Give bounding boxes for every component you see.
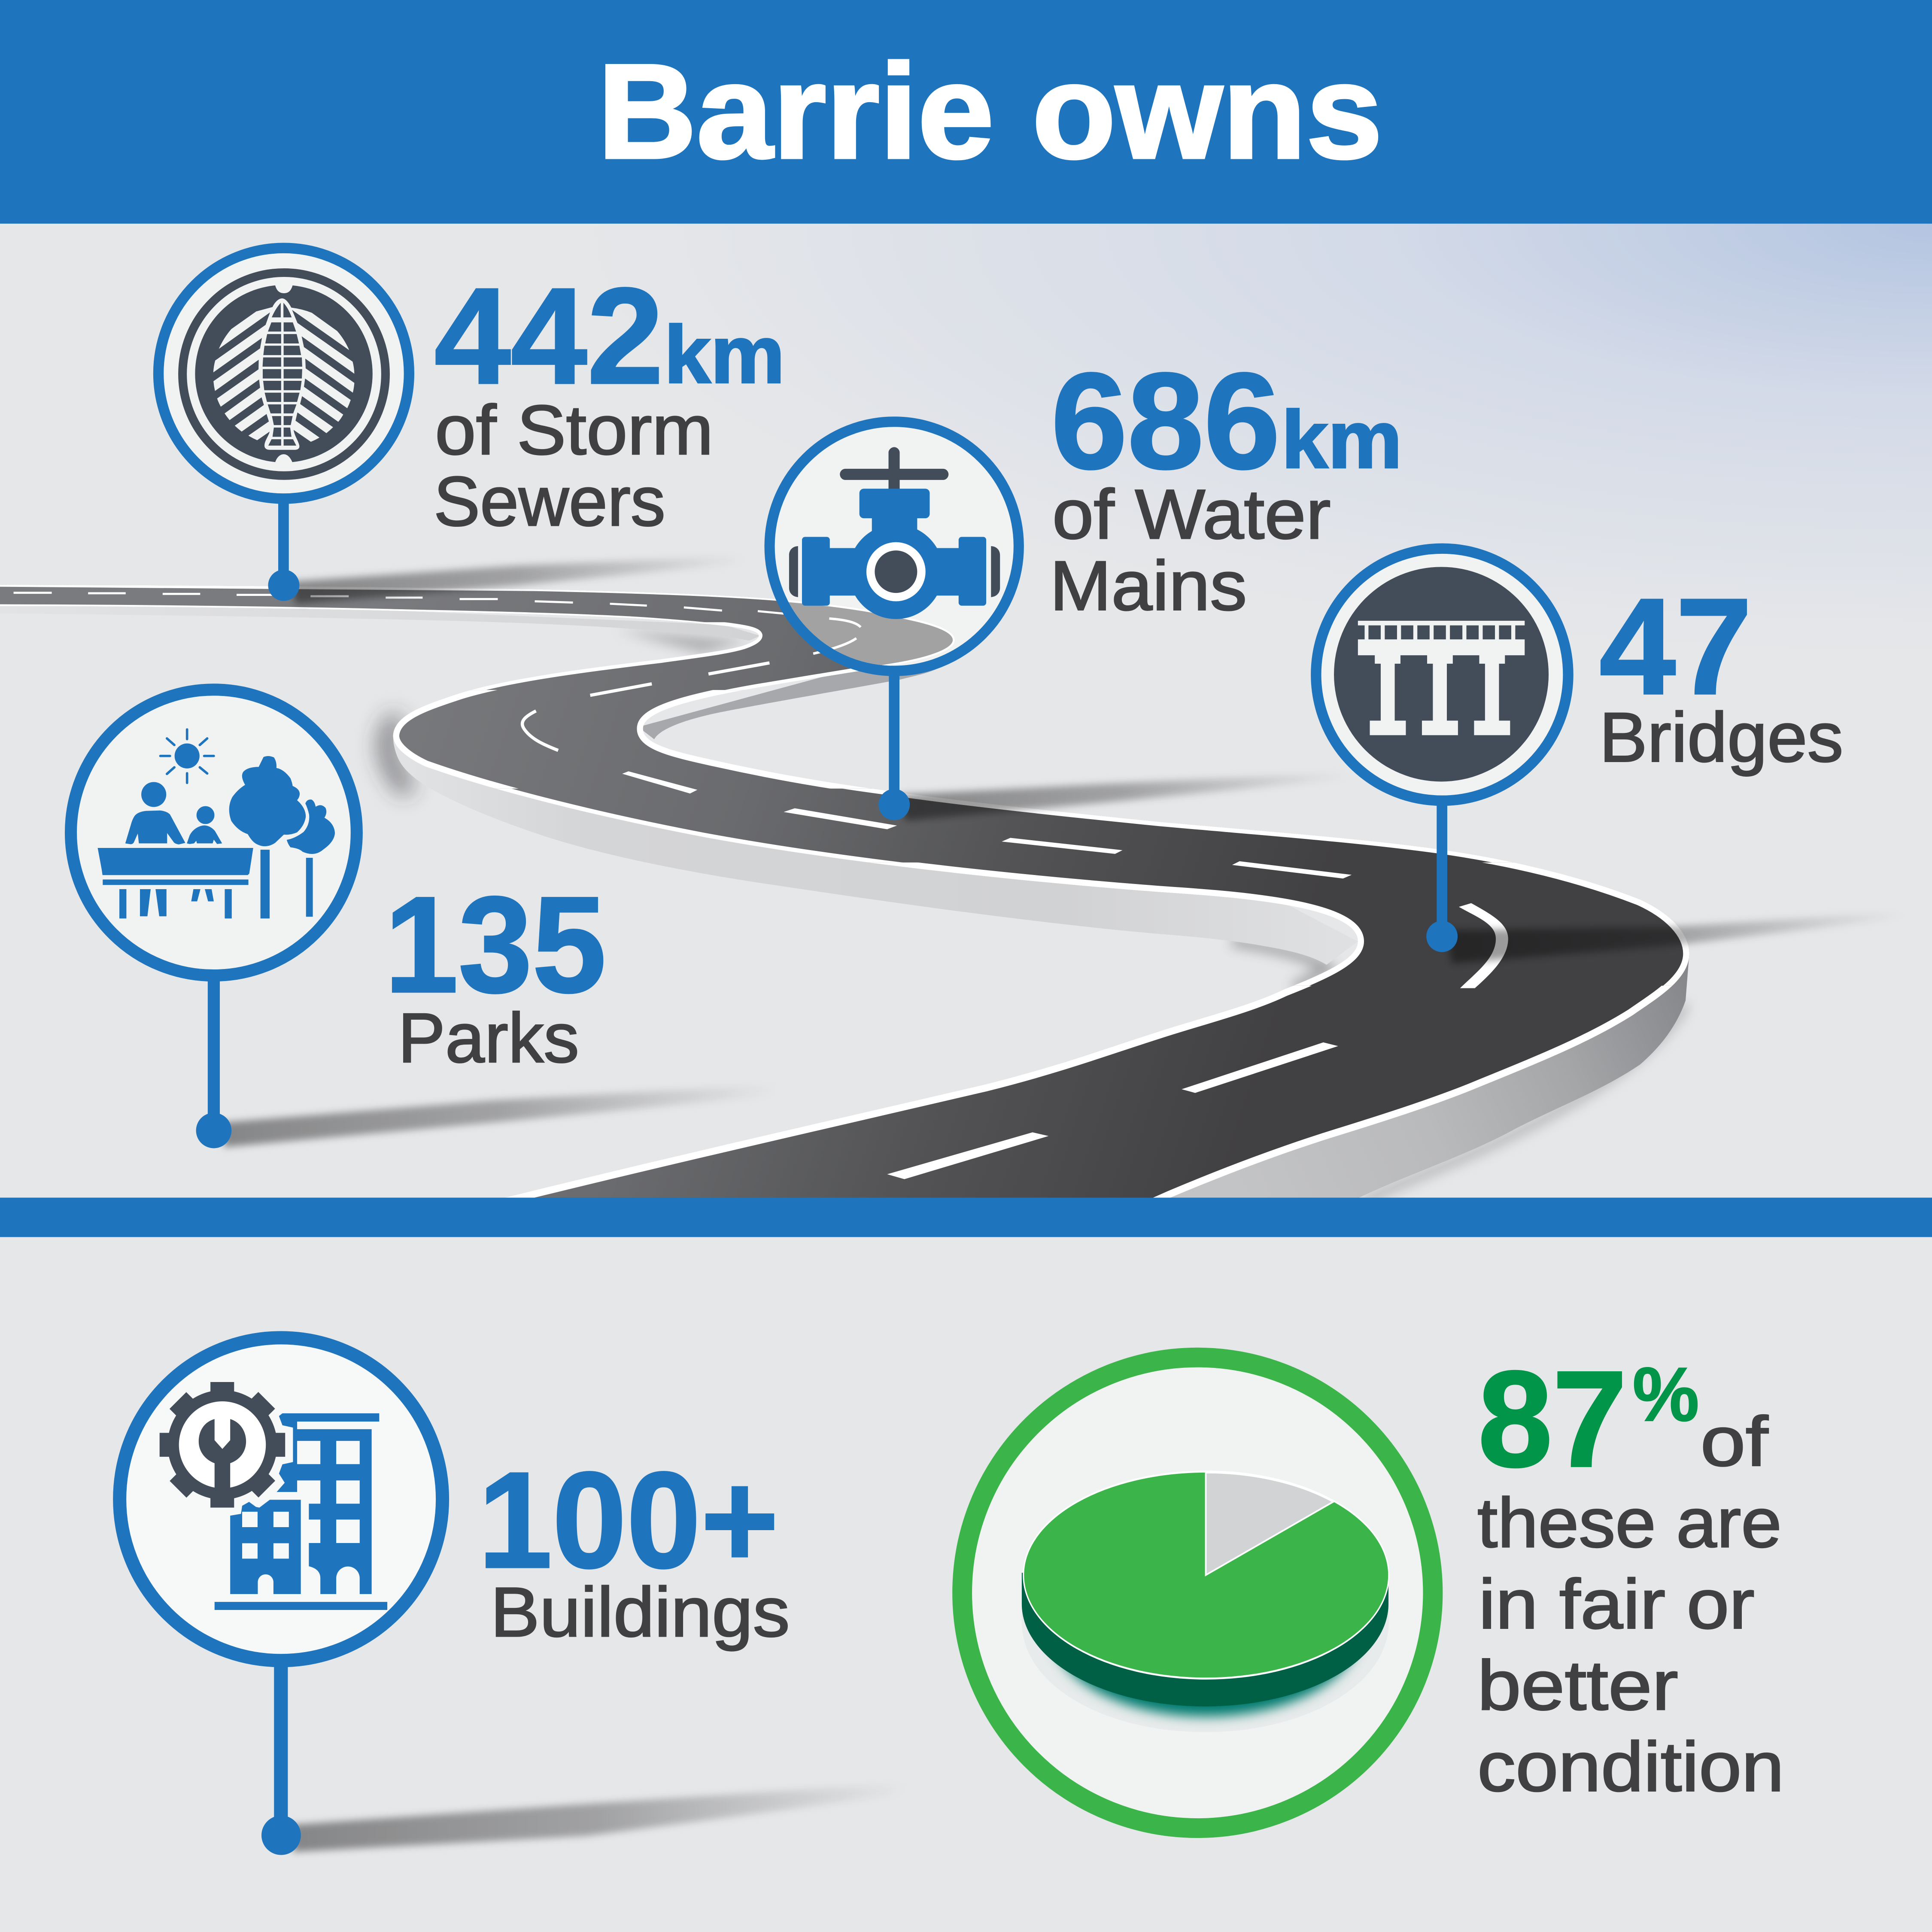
stat: water mains: [1050, 345, 1402, 625]
stat: storm sewers: km: [664, 310, 785, 400]
stat: storm sewers: [434, 260, 785, 541]
icon: bridge: [1334, 567, 1549, 781]
pie chart 87 percent: [1022, 1470, 1389, 1732]
pin: storm sewers: [158, 248, 409, 601]
stat: bridges: Bridges: [1599, 698, 1843, 777]
stat: condition: %: [1633, 1352, 1699, 1437]
stat: bridges: [1599, 570, 1843, 777]
stat: condition: in fair or: [1479, 1565, 1755, 1643]
icon: manhole cover: [182, 273, 386, 476]
title: Barrie owns: [598, 36, 1382, 186]
sky gradient panel: [0, 223, 1932, 1199]
pin: parks: [71, 690, 357, 1148]
stat: water mains: Mains: [1050, 547, 1247, 625]
stat: storm sewers: of Storm: [435, 391, 714, 469]
stat: water mains: km: [1282, 395, 1402, 485]
stat: buildings: Buildings: [490, 1573, 790, 1651]
stat: buildings: 100+: [478, 1444, 779, 1597]
stat: condition: condition: [1477, 1727, 1784, 1806]
stat: bridges: 47: [1599, 570, 1752, 723]
pin: buildings: [120, 1338, 443, 1855]
stat: storm sewers: 442: [434, 260, 663, 413]
stat: condition: [1477, 1343, 1784, 1806]
icon: park bench and trees: [98, 729, 335, 918]
stat: condition: 87: [1478, 1343, 1627, 1495]
pin: water mains: [764, 416, 1024, 820]
icon: gear and buildings: [160, 1382, 387, 1610]
icon: water valve: [789, 447, 1000, 619]
stat: water mains: of Water: [1052, 475, 1331, 553]
header banner: [0, 0, 1932, 224]
stat: condition: of: [1700, 1402, 1768, 1481]
divider bar: [0, 1198, 1932, 1237]
stat: water mains: 686: [1051, 345, 1280, 498]
stat: condition: better: [1477, 1646, 1678, 1725]
winding road: [0, 585, 1689, 1222]
panel: condition pie chart: [962, 1358, 1433, 1828]
pin: bridges: [1316, 549, 1568, 952]
stat: storm sewers: Sewers: [434, 462, 665, 541]
pin shadows on road: [222, 556, 1904, 1852]
stat: condition: these are: [1477, 1483, 1782, 1562]
stat: parks: 135: [384, 868, 606, 1021]
stat: parks: Parks: [398, 999, 579, 1077]
